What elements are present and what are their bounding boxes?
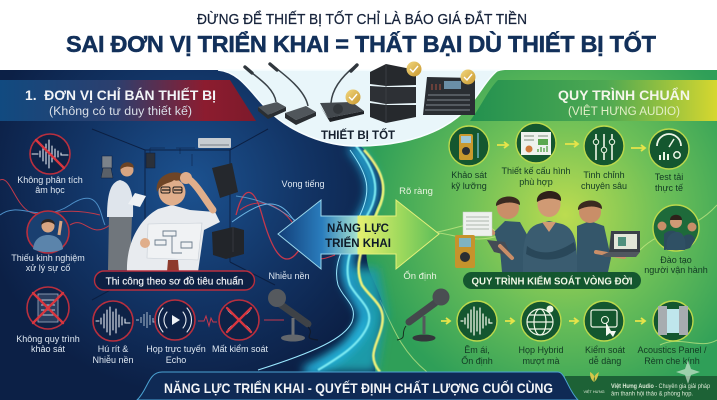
- right step: fine tuning: chuyên sâu: [581, 181, 627, 191]
- arrow 1: [497, 142, 508, 148]
- worried man: [127, 172, 220, 272]
- bottom arrow 2: [505, 318, 514, 324]
- lifecycle control pill: [463, 272, 641, 289]
- engineers team: [455, 191, 640, 272]
- central double arrow: [278, 200, 439, 269]
- left bottom: red link line: [264, 319, 284, 321]
- central glowing waves: [258, 146, 386, 372]
- left bottom: feedback icon: Hú rít &: [98, 344, 128, 354]
- label: echo: Vọng tiếng: [281, 179, 325, 189]
- air conditioner: [198, 138, 231, 148]
- main title: SAI ĐƠN VỊ TRIỂN KHAI = THẤT BẠI DÙ THIẾT BỊ TỐT: [66, 30, 657, 57]
- left bottom: loss of control icon: [212, 300, 269, 354]
- left banner subtitle: (Không có tư duy thiết kế): [49, 106, 192, 118]
- right step: design: phù hợp: [519, 177, 553, 187]
- multimeter: [455, 235, 475, 268]
- gold badge 2: [406, 62, 422, 76]
- label: background noise: Nhiễu nền: [268, 271, 310, 281]
- right step: fine tuning: Tinh chỉnh: [583, 170, 625, 180]
- blueprint sheet: [147, 223, 202, 260]
- footer brand strip: âm thanh hội thảo & phòng họp.: [611, 392, 693, 398]
- conference mic 2: [270, 64, 316, 125]
- right step: load test: Test tải: [655, 172, 683, 182]
- devices label: THIẾT BỊ TỐT: [321, 128, 395, 142]
- conference mic 1: [245, 67, 286, 119]
- left banner heading: 1. ĐƠN VỊ CHỈ BÁN THIẾT BỊ: [25, 87, 216, 103]
- right banner heading: QUY TRÌNH CHUẨN: [558, 86, 690, 103]
- left caption pill: [94, 271, 254, 290]
- checklist sheet: [463, 212, 492, 236]
- standing colleague: [107, 162, 146, 270]
- white device bubble: [218, 70, 498, 146]
- left item: no acoustic analysis: [17, 134, 83, 195]
- right microphone: [397, 288, 450, 342]
- right outcome: smooth sound: [457, 301, 497, 366]
- right engineer: [577, 200, 624, 272]
- left bottom: small wave connector: [136, 312, 155, 328]
- left bottom: online echo icon: Họp trực tuyến: [146, 344, 206, 354]
- left engineer: [476, 196, 530, 272]
- label: clear: Rõ ràng: [399, 186, 433, 197]
- left bottom: feedback icon: Nhiễu nền: [92, 355, 134, 365]
- right outcome: hybrid meeting: mượt mà: [523, 356, 559, 366]
- footer bar: NĂNG LỰC TRIỂN KHAI - QUYẾT ĐỊNH CHẤT LƯỢNG CUỐI CÙNG: [164, 379, 553, 396]
- arrow text: NĂNG LỰC: [327, 222, 389, 235]
- left bottom: feedback icon: [92, 301, 134, 365]
- wall bracket equipment: [101, 148, 195, 178]
- bottom arrow 4: [635, 318, 645, 324]
- right step: survey: [449, 126, 489, 191]
- panel: left navy: [0, 70, 400, 400]
- line array speaker: [370, 64, 416, 123]
- left item: lacking experience: xử lý sự cố: [26, 263, 70, 273]
- left bottom: online echo icon: Echo: [166, 355, 186, 365]
- right outcome: smooth sound: Êm ái,: [464, 345, 490, 355]
- gold badge 3: [460, 70, 476, 84]
- signal waves: left panel: [0, 179, 335, 259]
- footer brand strip: [565, 372, 717, 400]
- training circle: [644, 205, 708, 275]
- bottom arrow 3: [569, 318, 578, 324]
- left bottom: pulse connector: [198, 316, 217, 326]
- subwoofer: [212, 227, 244, 259]
- conference mic 3: [320, 65, 364, 122]
- footer bar: [137, 372, 578, 400]
- left item: lacking experience: [11, 211, 85, 273]
- arrow 2: [565, 141, 578, 147]
- training circle: người vận hành: [644, 265, 708, 275]
- bottom arrow 1: [441, 318, 450, 324]
- right outcome: acoustics panel: Rèm che kính: [644, 356, 700, 366]
- left microphone: [268, 289, 318, 342]
- right header banner: [470, 80, 717, 121]
- logo: [583, 372, 605, 394]
- illustration: confused technician scene: [101, 138, 244, 272]
- right outcome: easy control: dễ dàng: [589, 356, 621, 366]
- left item: no survey process: [16, 287, 80, 354]
- right outcome: hybrid meeting: [518, 301, 564, 366]
- logo: VIỆT HƯNG: [583, 389, 605, 394]
- right outcome: acoustics panel: Acoustics Panel /: [637, 345, 707, 355]
- training circle: Đào tạo: [660, 255, 692, 265]
- right step: load test: thực tế: [655, 183, 683, 193]
- right outcome: easy control: [584, 301, 626, 366]
- right step: design: Thiết kế cấu hình: [501, 166, 571, 176]
- brand text: Việt Hưng Audio - Chuyên gia giải pháp: [611, 384, 711, 390]
- left item: no acoustic analysis: Không phân tích: [17, 175, 83, 185]
- left caption pill: Thi công theo sơ đồ tiêu chuẩn: [106, 276, 243, 288]
- center engineer: [523, 191, 577, 272]
- label: stable: Ổn định: [403, 270, 437, 282]
- hanging speaker: [212, 163, 238, 198]
- top subtitle: ĐỪNG ĐỂ THIẾT BỊ TỐT CHỈ LÀ BÁO GIÁ ĐẮT TIỀN: [197, 10, 527, 28]
- left item: lacking experience: Thiếu kinh nghiệm: [11, 253, 85, 263]
- left item: no survey process: Không quy trình: [16, 334, 80, 344]
- panel: right green: [360, 70, 717, 400]
- left bottom: loss of control icon: Mất kiểm soát: [212, 344, 269, 354]
- audio mixer: [423, 77, 475, 115]
- right banner subtitle: (VIỆT HƯNG AUDIO): [568, 105, 680, 118]
- right outcome: hybrid meeting: Họp Hybrid: [518, 345, 564, 355]
- devices group: [245, 62, 476, 142]
- right step: survey: kỹ lưỡng: [451, 181, 487, 191]
- left header banner: [0, 80, 256, 121]
- arrow 3: [631, 145, 645, 151]
- laptop: [602, 231, 640, 257]
- right step: fine tuning: [581, 126, 627, 191]
- right step: design: [501, 123, 571, 187]
- right step: load test: [649, 129, 689, 193]
- right outcome: easy control: Kiểm soát: [585, 345, 626, 355]
- left item: no survey process: khảo sát: [31, 344, 66, 354]
- left panel room lines: [92, 129, 275, 300]
- right outcome: smooth sound: Ổn định: [461, 355, 493, 366]
- left item: no acoustic analysis: âm học: [35, 185, 65, 195]
- left bottom: online echo icon: [146, 300, 206, 365]
- gold badge 1: [346, 90, 360, 104]
- green accent waves: [380, 205, 717, 372]
- right step: survey: Khảo sát: [451, 170, 487, 180]
- lifecycle control pill: QUY TRÌNH KIỂM SOÁT VÒNG ĐỜI: [472, 274, 633, 288]
- sparkle: [676, 360, 700, 384]
- central double arrow: TRIỂN KHAI: [325, 237, 391, 250]
- right outcome: acoustics panel: [637, 301, 707, 366]
